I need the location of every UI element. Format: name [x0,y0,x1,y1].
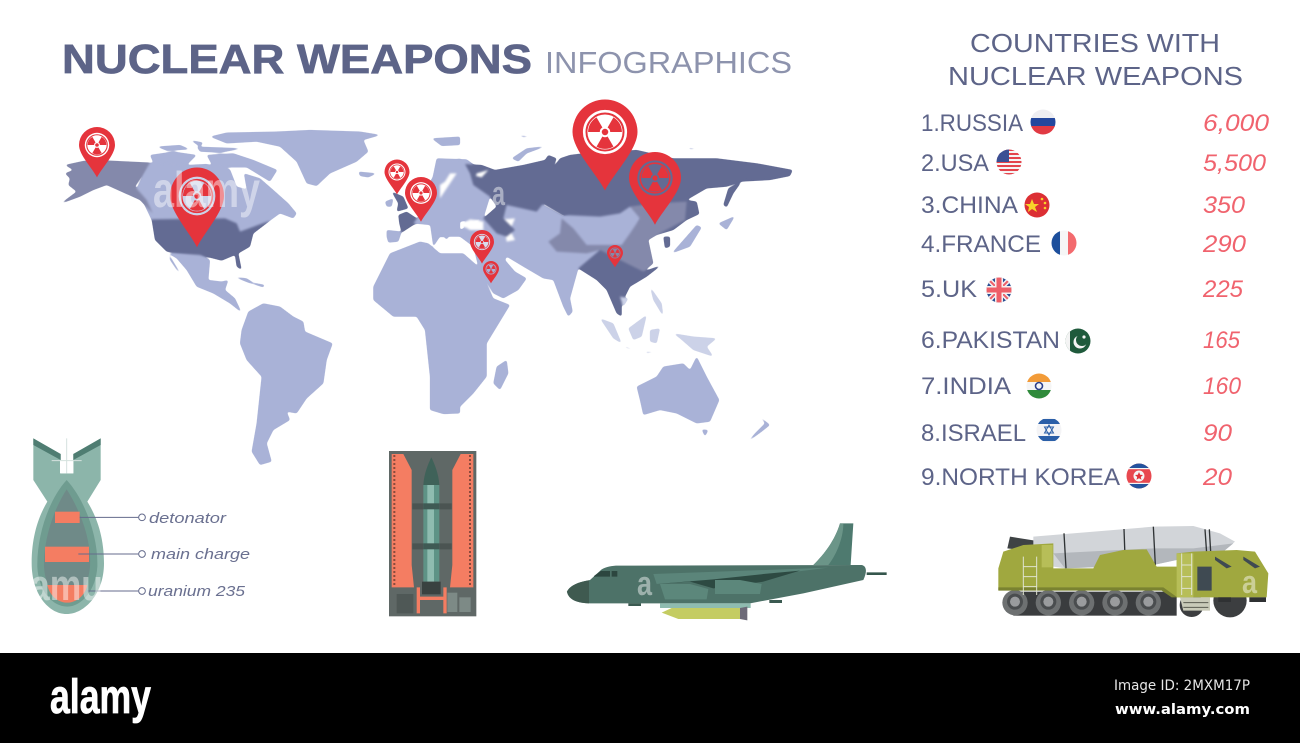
row: Russia [922,110,1269,134]
watermark overlays [30,162,1257,610]
missile launcher truck [998,526,1268,617]
heading: countries with nuclear weapons [948,28,1243,91]
map pin: Russia [572,100,638,190]
row: USA: 2.USA [921,150,989,177]
title [62,36,792,82]
row: Pakistan: 165 [1203,327,1241,354]
row: North Korea: 9.NORTH KOREA [921,464,1120,491]
row: China: 350 [1203,192,1246,219]
plane bomb [662,608,740,619]
image id: Image ID: 2MXM17P [1114,678,1250,694]
row: Israel: 90 [1203,420,1233,447]
map: eastern hemisphere [430,135,793,443]
row: Pakistan [921,327,1241,354]
label: main charge: main charge [151,546,250,563]
map pin: Israel [470,230,494,264]
row: France: 4.FRANCE [921,231,1041,258]
row: China: 3.CHINA [921,192,1018,219]
row: France: 290 [1202,231,1247,258]
country list [921,109,1270,491]
bomber plane [567,523,887,620]
row: USA: 5,500 [1203,150,1267,177]
bomb illustration [32,438,145,614]
website: www.alamy.com [1115,702,1250,718]
row: Russia: 6,000 [1203,110,1270,137]
title: NUCLEAR WEAPONS [62,36,532,82]
row: North Korea: 20 [1202,464,1233,491]
bomb diagram [32,438,250,614]
map: western hemisphere [60,130,460,465]
watermark overlays: a [637,565,653,603]
row: Russia: 1.RUSSIA [921,110,1023,137]
watermark overlays: a [492,175,506,213]
row: North Korea [922,464,1232,488]
row: UK: 225 [1202,276,1244,303]
row: UK [921,276,1244,303]
map landmasses [60,130,793,465]
map pin: India [607,245,623,267]
missile silo [389,451,476,616]
row: India: 160 [1203,373,1242,400]
footer bar [0,653,1300,743]
watermark overlays: alamy [153,162,260,218]
title: INFOGRAPHICS [545,45,792,80]
row: France [922,230,1246,256]
row: Pakistan: 6.PAKISTAN [921,327,1060,354]
watermark overlays: a [1242,564,1257,600]
row: Israel [922,418,1232,442]
row: Israel: 8.ISRAEL [921,420,1026,447]
row: USA [922,150,1266,174]
row: India: 7.INDIA [921,373,1011,400]
heading: countries with nuclear weapons: COUNTRIES WITH [970,28,1220,58]
label: uranium 235: uranium 235 [148,583,246,600]
map pin: UK [384,160,410,194]
map pin: Arabia [483,261,499,283]
heading: countries with nuclear weapons: NUCLEAR WEAPONS [948,61,1243,91]
map pin: China [629,152,681,225]
label: detonator: detonator [149,510,227,527]
footer logo: alamy [50,671,151,724]
row: UK: 5.UK [921,276,977,303]
world map [60,100,793,465]
map pin: Alaska [79,127,115,177]
map pin: France [405,177,437,222]
row: India [921,373,1242,400]
row: China [921,192,1246,219]
watermark overlays: amu [30,561,103,610]
map pin: USA [170,168,224,247]
